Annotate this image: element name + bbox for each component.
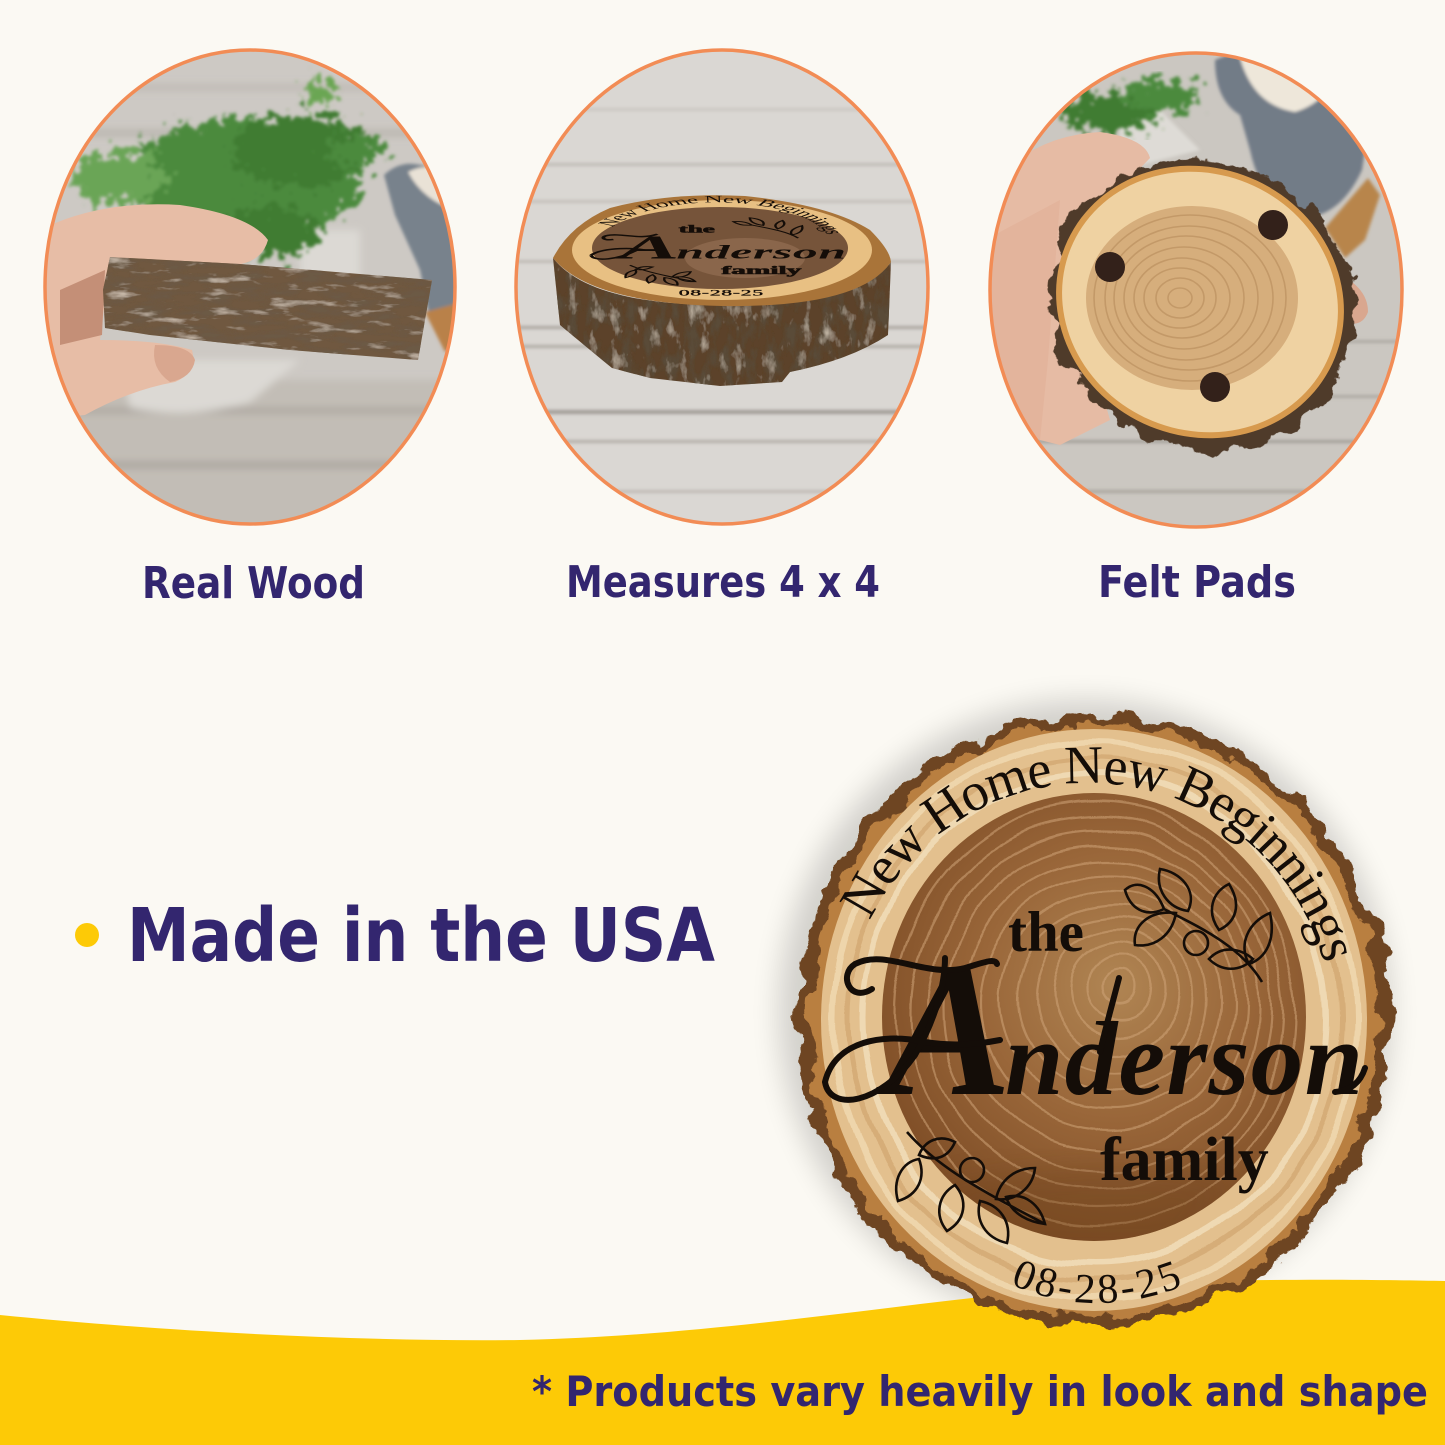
bullet dot xyxy=(75,923,99,947)
small engraved coaster text: the xyxy=(679,224,715,235)
coaster shadow xyxy=(779,700,1391,1324)
icon: grey mug xyxy=(382,162,454,354)
small engraved coaster text: 08-28-25 xyxy=(679,288,763,297)
panel: large engraved coaster xyxy=(790,709,1397,1330)
yellow wave footer band xyxy=(0,1280,1445,1445)
engraved script name: nderson xyxy=(1005,1000,1363,1117)
bark edge xyxy=(797,714,1391,1326)
icon: upper leaf sprig xyxy=(1125,869,1272,982)
icon: green plant xyxy=(1060,79,1198,132)
sapwood xyxy=(821,729,1367,1311)
engraved date: 08-28-25 xyxy=(1014,1261,1180,1304)
panel: measures photo xyxy=(514,48,930,526)
caption: measures: Measures 4 x 4 xyxy=(566,557,880,608)
caption: real wood: Real Wood xyxy=(142,558,365,609)
small engraved coaster text: family xyxy=(721,264,801,276)
heartwood with growth rings xyxy=(882,793,1306,1260)
heading: made in the USA: Made in the USA xyxy=(127,893,715,979)
small engraved coaster text: A xyxy=(614,228,680,266)
coaster side bark xyxy=(553,258,891,386)
icon: hand holding slab xyxy=(40,204,268,420)
small engraved coaster text: New Home New Beginnings xyxy=(598,196,838,234)
caption: felt pads: Felt Pads xyxy=(1098,557,1296,608)
panel: real wood photo xyxy=(40,45,470,530)
icon: lower leaf sprig xyxy=(896,1132,1045,1243)
coaster top surface xyxy=(553,195,891,306)
small engraved coaster text: nderson xyxy=(676,242,846,263)
engraved script name xyxy=(825,926,1365,1136)
wood slab side xyxy=(103,257,432,360)
icon: felt pads xyxy=(1095,210,1288,402)
panel: felt pads photo xyxy=(985,48,1410,533)
engraved text: family: family xyxy=(1100,1126,1269,1194)
icon: hand holding coaster xyxy=(985,132,1368,445)
engraved text: the: the xyxy=(1008,901,1084,964)
engraved script name: A xyxy=(875,926,1012,1136)
small engraved coaster text xyxy=(589,196,844,296)
engraved date xyxy=(1014,1261,1180,1304)
icon: grey mug xyxy=(1215,50,1380,258)
coaster underside xyxy=(1046,156,1359,458)
icon: green plant xyxy=(72,78,385,258)
engraved arc text: New Home New Beginnings xyxy=(840,747,1347,960)
